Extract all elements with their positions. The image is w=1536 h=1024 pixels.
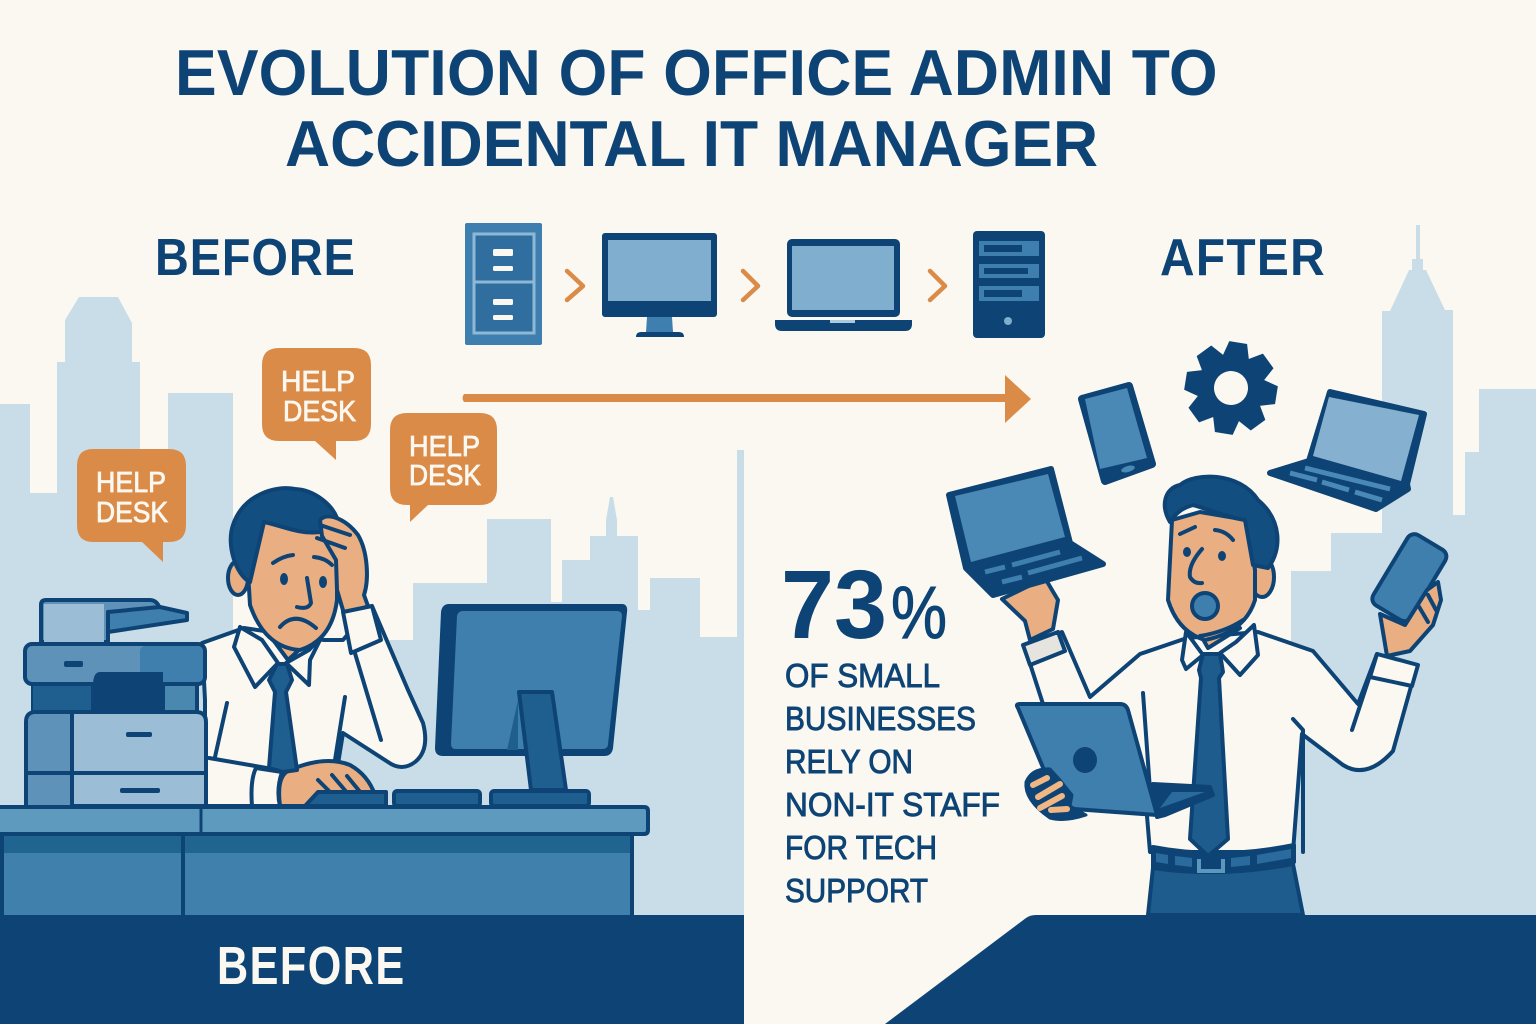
before label: BEFORE <box>217 937 404 996</box>
pants <box>1148 864 1303 915</box>
phone <box>1369 531 1449 624</box>
statistic caption: NON-IT STAFF <box>785 786 1000 823</box>
after heading: AFTER <box>1160 228 1325 286</box>
statistic caption: BUSINESSES <box>785 700 976 737</box>
statistic caption <box>785 657 1000 909</box>
tie <box>269 664 297 772</box>
right skyline <box>1291 225 1536 915</box>
percent figure: 73 <box>781 550 887 659</box>
icon: desktop monitor <box>602 233 717 337</box>
speech bubble: help desk middle: DESK <box>283 396 357 428</box>
collar <box>234 627 322 687</box>
left hand <box>1002 578 1058 640</box>
title: ACCIDENTAL IT MANAGER <box>285 107 1098 180</box>
raised cuff <box>343 606 381 653</box>
icon: gear <box>1178 335 1284 441</box>
speech bubble: help desk middle: HELP <box>281 366 355 398</box>
speech bubble: help desk left: HELP <box>96 467 166 499</box>
belt buckle <box>1199 859 1223 871</box>
keyboard and accessories <box>305 791 589 806</box>
title: EVOLUTION OF OFFICE ADMIN TO <box>175 36 1218 109</box>
left skyline <box>0 297 744 915</box>
ear <box>1250 557 1274 597</box>
face <box>247 522 337 650</box>
icon: floating laptop right <box>1270 392 1424 509</box>
right cuff <box>1370 654 1418 686</box>
arrow: before to after <box>462 375 1031 423</box>
shirt <box>1024 632 1417 852</box>
statistic caption: RELY ON <box>785 743 913 780</box>
monitor on desk <box>437 606 625 790</box>
speech bubble: help desk middle <box>262 348 371 460</box>
before heading: BEFORE <box>155 229 355 287</box>
statistic: 73 percent <box>781 550 1000 909</box>
held laptop <box>1017 704 1213 817</box>
neck <box>1195 625 1240 648</box>
desk <box>0 807 648 915</box>
statistic caption: SUPPORT <box>785 872 928 909</box>
statistic caption: OF SMALL <box>785 657 940 694</box>
speech bubble: help desk left <box>77 449 186 562</box>
facial features <box>273 555 332 628</box>
title <box>175 36 1218 180</box>
percent figure: % <box>891 571 947 654</box>
keyboard hand <box>279 761 375 806</box>
person: stressed office admin <box>202 488 425 806</box>
hair <box>1165 477 1277 568</box>
arrow: chevron 2 <box>743 271 758 300</box>
hair <box>231 488 337 582</box>
facial features <box>1180 527 1243 636</box>
face <box>1168 512 1255 640</box>
lower hand <box>1026 769 1086 819</box>
right hand <box>1380 582 1441 656</box>
left cuff <box>1023 632 1065 665</box>
bottom band left <box>0 915 744 1024</box>
statistic caption: FOR TECH <box>785 829 937 866</box>
arrow: chevron 3 <box>930 271 945 300</box>
speech bubble: help desk right <box>390 413 497 522</box>
icon: tablet <box>1082 386 1152 481</box>
person: overwhelmed IT manager <box>1002 477 1449 915</box>
speech bubble: help desk left: DESK <box>96 497 169 529</box>
speech bubble: help desk right: DESK <box>409 460 482 492</box>
icon: server tower <box>973 231 1045 338</box>
speech bubble: help desk right: HELP <box>409 431 480 463</box>
collar <box>1182 625 1258 675</box>
ear <box>228 561 248 595</box>
bottom band right <box>885 915 1536 1024</box>
icon: laptop on raised hand <box>949 469 1103 595</box>
percent figure <box>781 550 947 659</box>
printer <box>25 600 206 806</box>
neck <box>262 620 310 660</box>
tie <box>1190 654 1228 856</box>
shirt cuff <box>252 768 282 806</box>
arrow: chevron 1 <box>567 271 583 300</box>
belt <box>1153 845 1294 871</box>
icon: laptop <box>775 239 912 331</box>
icon: filing cabinet <box>465 223 542 345</box>
hand on head <box>320 516 368 617</box>
shirt <box>202 606 425 806</box>
